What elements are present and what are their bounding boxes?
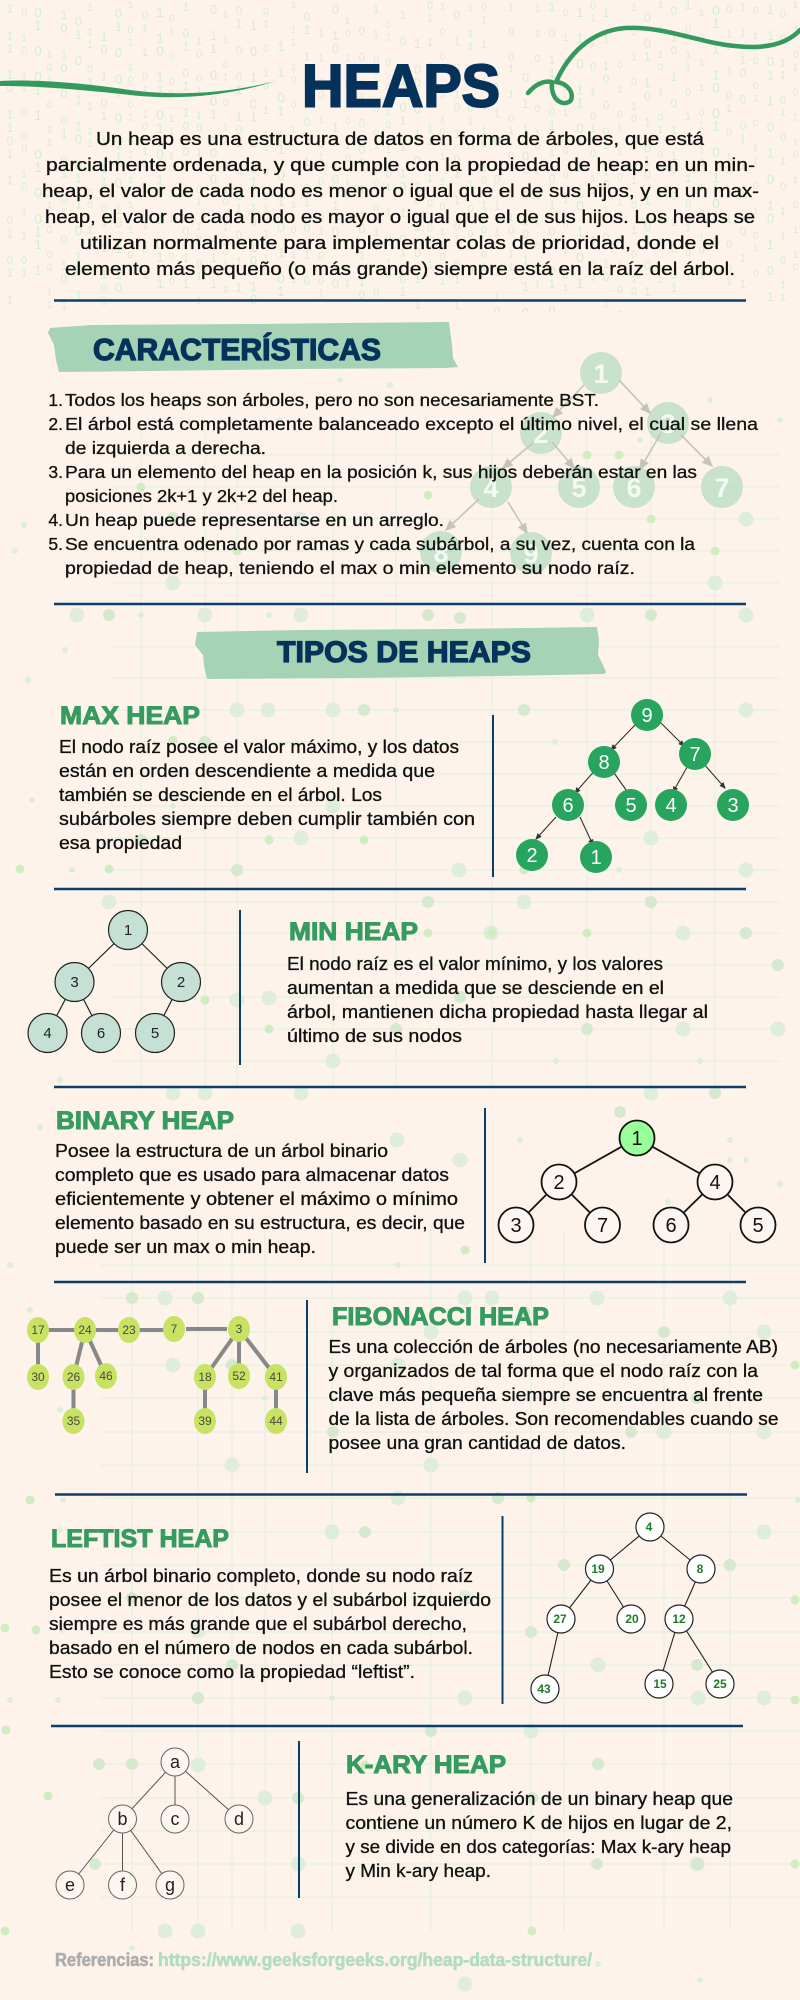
references: Referencias: bbox=[55, 1950, 154, 1970]
max heap tree diagram: 8 bbox=[598, 752, 610, 774]
background binary digit rain: 1 00 0 1 0 10 1 0 1 1 bbox=[410, 36, 425, 310]
background binary digit rain: 0 10 1 0 1 10 0 1 0 01 bbox=[667, 4, 681, 294]
background binary digit rain: 01 0 01 101 0 01 0 1 1 bbox=[232, 4, 246, 294]
intro paragraph bbox=[42, 129, 759, 279]
binary heap description: completo que es usado para almacenar datos bbox=[55, 1165, 449, 1185]
references: https://www.geeksforgeeks.org/heap-data-structure/ bbox=[158, 1950, 592, 1970]
fibonacci heap forest diagram: 3 bbox=[236, 1322, 243, 1336]
max heap description: también se desciende en el árbol. Los bbox=[59, 785, 382, 805]
max heap description: El nodo raíz posee el valor máximo, y los datos bbox=[59, 737, 459, 757]
characteristics list: de izquierda a derecha. bbox=[65, 438, 266, 458]
fibonacci heap description: de la lista de árboles. Son recomendables cuando se bbox=[328, 1409, 778, 1429]
background binary digit rain: 0 10 1 0 11 10 1 01 10 bbox=[328, 2, 343, 289]
max heap description: esa propiedad bbox=[59, 833, 182, 853]
characteristics list: 1. bbox=[48, 390, 63, 410]
fibonacci heap forest diagram: 39 bbox=[198, 1414, 212, 1428]
k-ary heap description: Es una generalización de un binary heap que bbox=[346, 1789, 733, 1809]
fibonacci heap forest diagram: 23 bbox=[122, 1323, 136, 1337]
k-ary heap tree diagram: d bbox=[234, 1809, 244, 1829]
leftist heap tree diagram: 15 bbox=[653, 1677, 667, 1691]
characteristics list: Todos los heaps son árboles, pero no son necesariamente BST. bbox=[65, 390, 599, 410]
panel: max heap bbox=[59, 699, 749, 877]
binary heap heading: BINARY HEAP bbox=[56, 1107, 234, 1135]
background binary digit rain: 10 1 01 0 10 10 0 1 01 bbox=[342, 16, 353, 291]
max heap tree diagram: 9 bbox=[641, 705, 653, 727]
fibonacci heap forest diagram: 18 bbox=[198, 1370, 212, 1384]
leftist heap description: Es un árbol binario completo, donde su nodo raíz bbox=[49, 1566, 473, 1586]
characteristics list: El árbol está completamente balanceado excepto el último nivel, el cual se llena bbox=[65, 414, 758, 434]
intro paragraph: Un heap es una estructura de datos en forma de árboles, que está bbox=[96, 129, 705, 149]
background binary digit rain: 1 1 10 0 01 10 1 0 10 1 bbox=[599, 6, 613, 310]
heading band: características: CARACTERÍSTICAS bbox=[93, 332, 381, 367]
characteristics list: 5. bbox=[48, 534, 63, 554]
leftist heap tree diagram: 20 bbox=[625, 1612, 639, 1626]
intro paragraph: parcialmente ordenada, y que cumple con la propiedad de heap: en un min- bbox=[46, 155, 755, 175]
leftist heap tree diagram: 19 bbox=[591, 1562, 605, 1576]
characteristics list: Se encuentra odenado por ramas y cada subárbol, a su vez, cuenta con la bbox=[65, 534, 695, 554]
leftist heap tree diagram: 43 bbox=[537, 1682, 551, 1696]
leftist heap tree diagram: 27 bbox=[553, 1612, 567, 1626]
fibonacci heap forest diagram: 35 bbox=[67, 1414, 80, 1428]
k-ary heap tree diagram: b bbox=[117, 1809, 128, 1829]
intro paragraph: elemento más pequeño (o más grande) siempre está en la raíz del árbol. bbox=[65, 259, 735, 279]
background binary digit rain: 1 0 00 1 10 1 1 0 110 1 bbox=[437, 2, 448, 290]
leftist heap tree diagram: 25 bbox=[713, 1677, 727, 1691]
faded tree illustration behind the list: 3 bbox=[660, 409, 676, 439]
fibonacci heap heading: FIBONACCI HEAP bbox=[332, 1303, 549, 1331]
min heap description: aumentan a medida que se desciende en el bbox=[287, 978, 664, 998]
min heap tree diagram bbox=[28, 910, 200, 1052]
fibonacci heap forest diagram: 30 bbox=[31, 1370, 45, 1384]
background binary digit rain: 1 1 011 0 01 10 0 10 1 0 bbox=[370, 4, 382, 300]
characteristics list bbox=[48, 390, 758, 578]
leftist heap tree diagram: 12 bbox=[672, 1612, 686, 1626]
k-ary heap description: y se divide en dos categorías: Max k-ary heap bbox=[346, 1837, 731, 1857]
fibonacci heap description: posee una gran cantidad de datos. bbox=[328, 1433, 626, 1453]
fibonacci heap forest diagram: 46 bbox=[99, 1369, 113, 1383]
background binary digit rain: 1 1 0 11 01 0 10 1 0 1 bbox=[572, 4, 588, 288]
fibonacci heap forest diagram: 52 bbox=[232, 1369, 246, 1383]
k-ary heap tree diagram bbox=[56, 1748, 253, 1899]
binary heap tree diagram: 5 bbox=[752, 1215, 764, 1237]
background binary digit rain: 01 1 01 1 11 01 0 01 1 bbox=[424, 0, 436, 272]
divider bbox=[55, 1493, 747, 1496]
background binary digit rain: 0 1 0 10 1 01 1 01 01 1 bbox=[450, 8, 464, 312]
title: HEAPS bbox=[302, 52, 500, 120]
binary heap tree diagram: 7 bbox=[597, 1215, 608, 1237]
fibonacci heap forest diagram: 17 bbox=[31, 1323, 45, 1337]
background binary digit rain: 01 1 01 01 1 01 0 1 0 bbox=[300, 10, 314, 287]
max heap tree diagram: 5 bbox=[625, 795, 637, 817]
k-ary heap tree diagram: a bbox=[170, 1752, 181, 1772]
background binary digit rain: 1 01 01 10 00 1 10 1 1 bbox=[179, 0, 193, 290]
faded tree illustration behind the list: 7 bbox=[714, 473, 730, 503]
panel: leftist heap bbox=[49, 1513, 734, 1704]
faded tree illustration behind the list: 4 bbox=[483, 473, 499, 503]
k-ary heap heading: K-ARY HEAP bbox=[346, 1751, 506, 1779]
background binary digit rain: 01 1 0 1 01 0 11 0 1 01 bbox=[587, 0, 599, 284]
background binary digit rain: 1 0 01 1 01 01 0 10 11 bbox=[505, 2, 517, 274]
background binary digit rain: 1 0 110 01 1 0 1 01 01 0 bbox=[545, 0, 559, 312]
decorative swoosh left bbox=[0, 81, 276, 97]
fibonacci heap description: y organizados de tal forma que el nodo raíz con la bbox=[328, 1361, 759, 1381]
background binary digit rain: 1 0 11 0 1 0 11 0 1 0 1 bbox=[682, 0, 694, 284]
background binary digit rain: 1 1 01 0 11 0 10 1 01 1 bbox=[220, 10, 231, 298]
intro paragraph: heap, el valor de cada nodo es menor o igual que el de sus hijos, y en un max- bbox=[42, 181, 759, 201]
panel: fibonacci heap bbox=[27, 1300, 778, 1473]
binary heap tree diagram: 6 bbox=[665, 1215, 677, 1237]
faded tree illustration behind the list: 9 bbox=[523, 539, 539, 569]
characteristics list: propiedad de heap, teniendo el max o min elemento su nodo raíz. bbox=[65, 558, 635, 578]
faded tree illustration behind the list: 2 bbox=[533, 419, 549, 449]
leftist heap description: posee el menor de los datos y el subárbol izquierdo bbox=[49, 1590, 491, 1610]
max heap tree diagram: 2 bbox=[526, 845, 538, 867]
background binary digit rain: 1 1 10 1 01 01 1 0 1 11 bbox=[655, 0, 666, 288]
characteristics list: 3. bbox=[48, 462, 63, 482]
background binary digit rain: 1 1 10 0 01 1 0 10 1 1 bbox=[736, 0, 750, 290]
panel: min heap bbox=[28, 910, 708, 1065]
binary heap description: puede ser un max o min heap. bbox=[55, 1237, 316, 1257]
background binary digit rain: 01 0 01 1 01 0 011 1 bbox=[30, 4, 46, 275]
background binary digit rain: 1 1 01 01 0 110 1 01 bbox=[273, 38, 289, 296]
max heap tree diagram: 6 bbox=[562, 795, 574, 817]
binary heap tree diagram: 4 bbox=[709, 1172, 721, 1194]
k-ary heap description: y Min k-ary heap. bbox=[346, 1861, 491, 1881]
background binary digit rain: 0 11 0 01 10 01 1 01 1 bbox=[206, 2, 221, 289]
background binary digit rain: 1 10 11 01 0 10 1 01 1 bbox=[152, 4, 168, 288]
fibonacci heap description: clave más pequeña siempre se encuentra al frente bbox=[328, 1385, 763, 1405]
leftist heap tree diagram: 8 bbox=[697, 1562, 704, 1576]
fibonacci heap forest diagram: 26 bbox=[67, 1370, 80, 1384]
fibonacci heap forest diagram: 41 bbox=[269, 1370, 283, 1384]
background binary digit rain: 01 0 00 11 10 1 1 10 0 bbox=[166, 14, 177, 289]
background binary digit rain: 1 1 01 1 0 1 0 10 1 0 1 bbox=[763, 2, 778, 302]
background binary digit rain: 1 11 10 0 10 1 01 0 101 bbox=[288, 0, 299, 288]
background binary digit rain: 01 0 01 10 01 1 0 10 1 bbox=[71, 14, 86, 301]
fibonacci heap forest diagram bbox=[27, 1316, 287, 1434]
min heap tree diagram: 2 bbox=[177, 974, 185, 991]
background binary digit rain: 1 01 10 01 01 1 1 1 01 bbox=[125, 0, 136, 275]
min heap description: árbol, mantienen dicha propiedad hasta llegar al bbox=[287, 1002, 708, 1022]
background binary digit rain: 1 11 10 1101 1 01 01 1 bbox=[3, 2, 17, 306]
binary heap description: elemento basado en su estructura, es decir, que bbox=[55, 1213, 465, 1233]
background binary digit rain: 01 1 10 01 0 1 01 0 1 bbox=[708, 2, 724, 273]
panel: binary heap bbox=[55, 1107, 776, 1263]
divider bbox=[54, 888, 746, 890]
background binary digit rain bbox=[3, 0, 800, 312]
background binary digit rain: 1 1 0 1 0 10 1 0 1 0 01 bbox=[532, 4, 543, 292]
min heap description bbox=[287, 954, 708, 1046]
max heap heading: MAX HEAP bbox=[60, 702, 200, 730]
background binary digit rain: 0 1 0 01 0 11 0 1 01 0 bbox=[750, 6, 761, 281]
k-ary heap tree diagram: c bbox=[170, 1809, 180, 1829]
background binary digit rain: 101 0 11 1 11 0 00 11 bbox=[44, 50, 55, 312]
background binary digit rain: 0 10 11 0 00 10 1 1 01 bbox=[18, 8, 30, 280]
background binary digit rain: 0 01 10 1 010 1 01 0 1 bbox=[640, 10, 655, 297]
max heap tree diagram: 7 bbox=[689, 744, 701, 766]
background binary digit rain: 10 01 10 10 01 10 01 1 bbox=[193, 36, 205, 308]
background binary digit rain: 1 0 1 0 10 1 01 0 1 0 10 bbox=[628, 2, 640, 298]
min heap description: El nodo raíz es el valor mínimo, y los valores bbox=[287, 954, 663, 974]
leftist heap description: Esto se conoce como la propiedad “leftist”. bbox=[49, 1662, 415, 1682]
k-ary heap tree diagram: f bbox=[120, 1875, 126, 1895]
binary heap tree diagram: 3 bbox=[510, 1215, 522, 1237]
background binary digit rain: 01 1 01 10 10 1 01 0 1 bbox=[139, 10, 151, 282]
binary heap description: Posee la estructura de un árbol binario bbox=[55, 1141, 388, 1161]
divider bbox=[54, 603, 746, 605]
divider bbox=[54, 299, 746, 302]
decorative swoosh right bbox=[528, 28, 800, 103]
background binary digit rain: 1 11 00 01 0 11 0 01 0 bbox=[465, 4, 476, 279]
max heap tree diagram: 1 bbox=[590, 847, 602, 869]
faded tree illustration behind the list: 6 bbox=[626, 473, 642, 503]
panel: k-ary heap bbox=[56, 1741, 733, 1899]
leftist heap heading: LEFTIST HEAP bbox=[51, 1525, 229, 1553]
background binary digit rain: 01 0 10 1 11 0 01 1 10 bbox=[260, 6, 272, 278]
characteristics list: Un heap puede representarse en un arreglo. bbox=[65, 510, 444, 530]
background binary digit rain: 10 1 01 1 11 01 1 100 bbox=[97, 30, 111, 307]
background binary digit rain: 1 0 1 1 01 10 1 0 10 1 bbox=[696, 8, 707, 283]
max heap tree diagram: 3 bbox=[727, 795, 739, 817]
min heap tree diagram: 5 bbox=[151, 1025, 159, 1042]
divider bbox=[54, 1281, 746, 1283]
heading band: tipos de heaps: TIPOS DE HEAPS bbox=[277, 636, 531, 669]
background binary digit rain: 1 0 01 01 1 10 1 01 01 bbox=[396, 8, 410, 298]
divider bbox=[51, 1725, 743, 1727]
characteristics list: 4. bbox=[48, 510, 63, 530]
background binary digit rain: 1 0 1 01 1 01 10 10 10 bbox=[246, 18, 261, 305]
leftist heap description: siempre es más grande que el subárbol derecho, bbox=[49, 1614, 467, 1634]
background binary digit rain: 10 10 0 01 01 01 0 10 1 bbox=[57, 8, 71, 312]
divider bbox=[54, 1086, 746, 1088]
heading band: tipos de heaps bbox=[195, 627, 606, 679]
faded tree illustration behind the list: 8 bbox=[433, 538, 449, 568]
background binary digit rain: 0 1 1 0 1 10 0 1 0 1 01 bbox=[560, 8, 571, 296]
binary heap tree diagram: 2 bbox=[553, 1172, 565, 1194]
max heap description: subárboles siempre deben cumplir también con bbox=[59, 809, 475, 829]
max heap tree diagram: 4 bbox=[665, 795, 677, 817]
characteristics list: posiciones 2k+1 y 2k+2 del heap. bbox=[65, 486, 338, 506]
binary heap tree diagram bbox=[498, 1120, 776, 1242]
min heap tree diagram: 6 bbox=[97, 1025, 105, 1042]
min heap heading: MIN HEAP bbox=[289, 918, 418, 946]
faded tree illustration behind the list: 1 bbox=[593, 359, 609, 389]
binary heap description bbox=[55, 1141, 465, 1257]
characteristics list: Para un elemento del heap en la posición k, sus hijos deberán estar en las bbox=[65, 462, 697, 482]
min heap tree diagram: 4 bbox=[43, 1025, 52, 1042]
heading band: características bbox=[48, 322, 458, 372]
k-ary heap tree diagram: e bbox=[65, 1875, 75, 1895]
background binary digit rain: 1 11 01 1 11 1 00 11 1 bbox=[84, 2, 96, 274]
leftist heap description bbox=[49, 1566, 491, 1682]
fibonacci heap forest diagram: 44 bbox=[269, 1414, 283, 1428]
background binary digit rain: 01 1 01 0 10 10 1 0 01 bbox=[478, 2, 490, 274]
binary heap tree diagram: 1 bbox=[631, 1128, 643, 1150]
min heap tree diagram: 3 bbox=[70, 974, 79, 991]
fibonacci heap forest diagram: 24 bbox=[78, 1323, 92, 1337]
leftist heap description: basado en el número de nodos en cada subárbol. bbox=[49, 1638, 473, 1658]
fibonacci heap description: Es una colección de árboles (no necesariamente AB) bbox=[328, 1337, 778, 1357]
max heap tree diagram bbox=[516, 699, 749, 873]
k-ary heap tree diagram: g bbox=[165, 1875, 175, 1895]
faded tree illustration behind the list bbox=[420, 352, 743, 574]
min heap description: último de sus nodos bbox=[287, 1026, 462, 1046]
background grid pattern bbox=[5, 380, 800, 1984]
background binary digit rain: 01 0 0 10 1 01 1 0 10 bbox=[383, 20, 394, 282]
binary heap description: eficientemente y obtener el máximo o mínimo bbox=[55, 1189, 458, 1209]
background binary digit rain: 0 10 1 01 0 10 1 1 0 01 bbox=[723, 4, 735, 288]
min heap tree diagram: 1 bbox=[124, 922, 132, 939]
intro paragraph: utilizan normalmente para implementar colas de prioridad, donde el bbox=[80, 233, 719, 253]
k-ary heap description bbox=[346, 1789, 733, 1881]
characteristics list: 2. bbox=[48, 414, 63, 434]
leftist heap tree diagram: 4 bbox=[646, 1520, 653, 1534]
background binary digit rain: 01 0 01 0 11 0 10 1 10 bbox=[111, 6, 126, 293]
background binary digit rain: 0 0 11 01 0 1 0 1 1 0 11 bbox=[777, 8, 789, 304]
max heap description bbox=[59, 737, 475, 853]
k-ary heap description: contiene un número K de hijos en lugar de 2, bbox=[346, 1813, 732, 1833]
intro paragraph: heap, el valor de cada nodo es mayor o igual que el de sus hijos. Los heaps se bbox=[45, 207, 755, 227]
fibonacci heap description bbox=[328, 1337, 778, 1453]
max heap description: están en orden descendiente a medida que bbox=[59, 761, 435, 781]
faded tree illustration behind the list: 5 bbox=[571, 473, 587, 503]
fibonacci heap forest diagram: 7 bbox=[171, 1322, 178, 1336]
leftist heap tree diagram bbox=[531, 1513, 734, 1703]
